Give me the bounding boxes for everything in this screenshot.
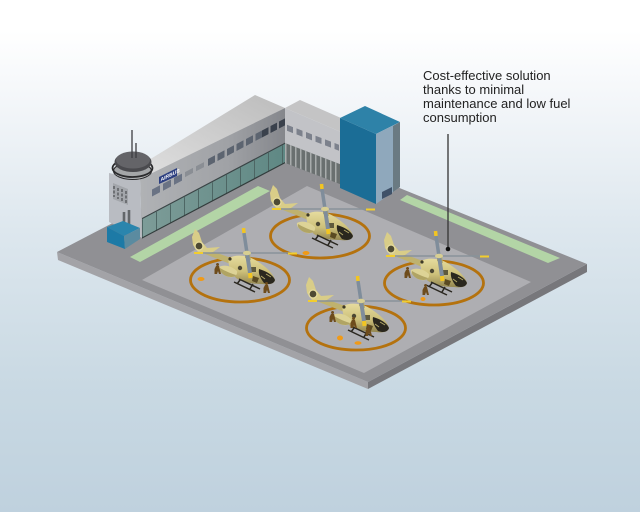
helipad: left [190, 228, 297, 302]
concrete apron [142, 186, 531, 373]
green strip left [130, 186, 270, 262]
control tower [107, 130, 152, 249]
callout text: consumption [423, 110, 497, 125]
main building [126, 95, 285, 238]
Airbus sign: AIRBUS [160, 168, 180, 183]
callout text: thanks to minimal [423, 82, 524, 97]
callout text: Cost-effective solution [423, 68, 551, 83]
glass facade [142, 143, 285, 238]
callout text: maintenance and low fuel [423, 96, 571, 111]
helipad: right [384, 231, 489, 305]
building front wall [140, 108, 285, 238]
blue tower [340, 106, 400, 204]
helipad: front [306, 276, 426, 350]
side wing [285, 100, 341, 184]
building roof [126, 95, 285, 181]
windows [152, 122, 285, 193]
blue annex [107, 221, 140, 249]
helipad: back [270, 184, 375, 258]
callout leader line [446, 134, 450, 251]
platform [57, 138, 587, 389]
green strip right [400, 195, 560, 263]
